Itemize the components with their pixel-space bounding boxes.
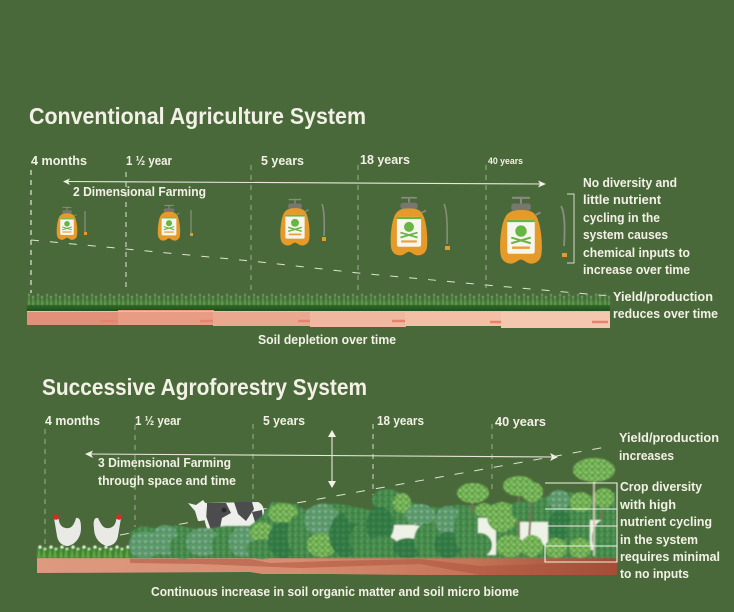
title: successive agroforestry: Successive Agroforestry System [42, 374, 367, 400]
text: no diversity: chemical inputs to [583, 246, 690, 260]
icon: sprayer 18 years [391, 198, 450, 255]
icon: chicken left [53, 514, 81, 546]
arrow: horizontal span [85, 450, 558, 461]
text: no diversity [583, 176, 690, 277]
text: crop diversity: to no inputs [620, 567, 689, 581]
time labels: 5 years [263, 414, 305, 428]
time labels: 18 years [377, 414, 424, 428]
text: yield reduces [613, 290, 718, 321]
text: crop diversity: requires minimal [620, 550, 720, 564]
title: conventional agriculture: Conventional Agriculture System [29, 103, 366, 129]
icon: chicken right [94, 514, 122, 546]
text: crop diversity: Crop diversity [620, 480, 702, 494]
caption: continuous increase: Continuous increase in soil organic matter and soil micro biome [151, 585, 519, 599]
time labels: 4 months [31, 154, 87, 168]
foliage mass [130, 492, 617, 558]
time labels: 4 months [45, 414, 100, 428]
text: yield increases: increases [619, 449, 674, 463]
arrow: 2 dimensional span [63, 178, 546, 188]
text: yield increases [619, 431, 719, 463]
text: no diversity: No diversity and [583, 176, 677, 190]
text: crop diversity: nutrient cycling [620, 515, 712, 529]
text: no diversity: cycling in the [583, 211, 660, 225]
soil strip: rich [37, 557, 617, 575]
text: crop diversity [619, 480, 720, 581]
label: 2 dimensional farming: 2 Dimensional Farming [73, 185, 206, 199]
text: no diversity: system causes [583, 228, 668, 242]
time labels: 5 years [261, 154, 304, 168]
decline line [31, 240, 610, 296]
crops row [27, 293, 610, 311]
text: crop diversity: in the system [620, 533, 698, 547]
icon: sprayer 1.5 years [158, 205, 193, 241]
text: no diversity: little nutrient [583, 193, 662, 207]
boxes: crop layers [545, 483, 617, 562]
label: 3 dimensional farming [98, 456, 236, 488]
icon: sprayer 40 years [500, 198, 567, 264]
text: yield reduces: Yield/production [613, 290, 713, 304]
text: yield reduces: reduces over time [613, 307, 718, 321]
icon: sprayer 5 years [280, 200, 326, 246]
label: 3 dimensional farming: 3 Dimensional Farming [98, 456, 231, 470]
icon: sprayer 4 months [57, 207, 87, 240]
text: yield increases: Yield/production [619, 431, 719, 445]
bracket: chemical inputs [567, 194, 574, 263]
caption: soil depletion: Soil depletion over time [258, 333, 396, 347]
time labels: 18 years [360, 153, 410, 167]
time labels: 40 years [488, 156, 523, 166]
arrow: vertical span [328, 430, 336, 488]
label: 3 dimensional farming: through space and time [98, 474, 236, 488]
white gaps [391, 518, 604, 555]
soil strip: depletion [27, 310, 610, 328]
ground cover [37, 544, 132, 558]
text: no diversity: increase over time [583, 263, 690, 277]
panel: agroforestry timeline [37, 414, 720, 599]
time labels: 1 ½ year [135, 414, 181, 428]
plants: succession of shrubs and trees [129, 458, 617, 559]
panel: conventional agriculture timeline [27, 153, 718, 347]
time labels: 40 years [495, 415, 546, 429]
time labels [45, 414, 546, 429]
icon: cow [188, 500, 264, 534]
text: crop diversity: with high [619, 498, 676, 512]
time labels: 1 ½ year [126, 154, 172, 168]
time labels [31, 153, 523, 168]
rising line [120, 447, 606, 535]
